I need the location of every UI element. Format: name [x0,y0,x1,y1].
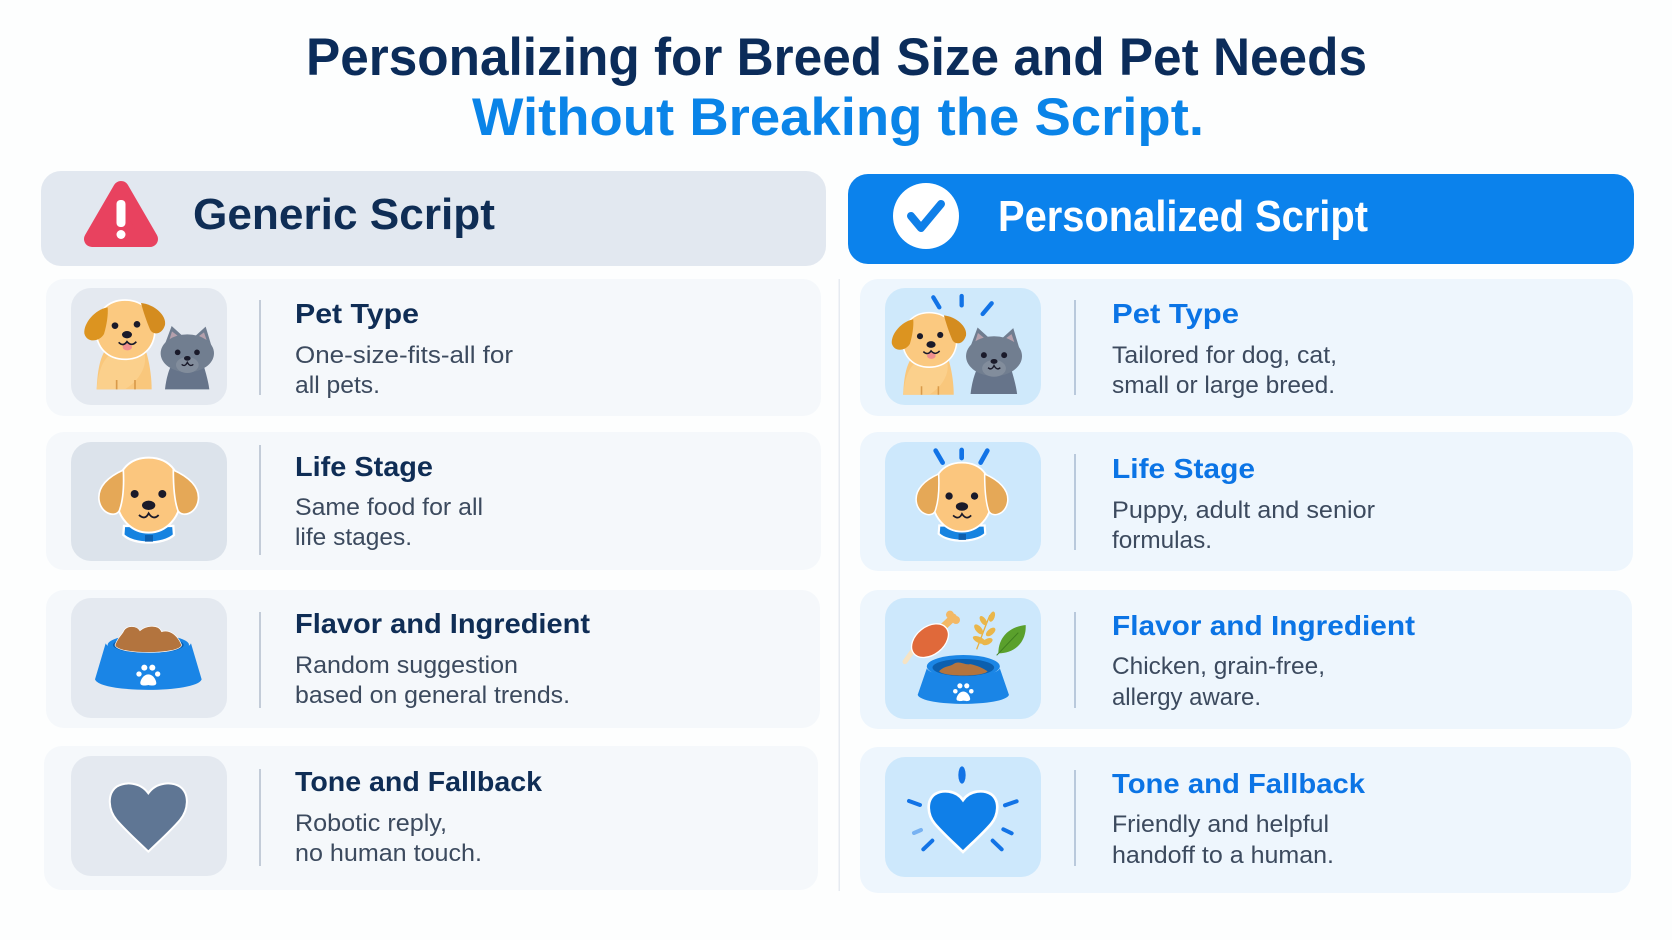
icon: dog and cat with rays [885,288,1041,405]
heading: Life Stage [1112,453,1255,484]
generic header [41,171,826,266]
description: Puppy, adult and senior [1112,497,1375,524]
description [1112,342,1337,399]
icon: bowl with chicken, wheat and leaf [885,598,1041,719]
heading: Tone and Fallback [1112,768,1365,799]
description: Robotic reply, [295,810,447,837]
heading: Pet Type [295,298,419,329]
description [1112,653,1325,711]
description: all pets. [295,372,380,399]
icon: grey heart [71,756,227,876]
row: generic tone and fallback [44,746,818,890]
description: formulas. [1112,527,1212,554]
heading: Pet Type [1112,298,1239,329]
personalized header [848,174,1634,264]
heading: Life Stage [295,451,433,482]
personalized heading: Personalized Script [998,192,1368,241]
icon: warning triangle [92,189,150,239]
panel: personalized script [848,174,1634,893]
description [295,494,483,551]
generic heading: Generic Script [193,190,495,239]
description: Chicken, grain-free, [1112,653,1325,680]
description: Random suggestion [295,652,518,679]
description [295,342,513,399]
description: no human touch. [295,840,482,867]
title line 1: Personalizing for Breed Size and Pet Needs [306,28,1367,87]
title line 2: Without Breaking the Script. [472,88,1204,147]
icon: check circle [893,183,959,249]
icon: food bowl [71,598,227,718]
description [1112,811,1334,869]
row: generic life stage [46,432,821,570]
panel: generic script [41,171,826,890]
description [1112,497,1375,554]
row: generic pet type [46,279,821,416]
icon: dog head with rays [885,442,1041,561]
description: small or large breed. [1112,372,1335,399]
description: Same food for all [295,494,483,521]
row: personalized flavor and ingredient [860,590,1632,729]
description: handoff to a human. [1112,842,1334,869]
title [306,28,1367,147]
row: personalized tone and fallback [860,747,1631,893]
icon: dog head [71,442,227,561]
description: One-size-fits-all for [295,342,513,369]
description [295,810,482,867]
icon: blue heart with rays [885,757,1041,877]
description: allergy aware. [1112,684,1261,711]
heading: Flavor and Ingredient [295,608,590,639]
description: based on general trends. [295,682,570,709]
description: Tailored for dog, cat, [1112,342,1337,369]
description: life stages. [295,524,412,551]
description: Friendly and helpful [1112,811,1329,838]
heading: Flavor and Ingredient [1112,610,1415,641]
row: personalized pet type [860,279,1633,416]
row: personalized life stage [860,432,1633,571]
icon: dog and cat [71,288,227,405]
description [295,652,570,709]
row: generic flavor and ingredient [46,590,820,728]
heading: Tone and Fallback [295,766,542,797]
